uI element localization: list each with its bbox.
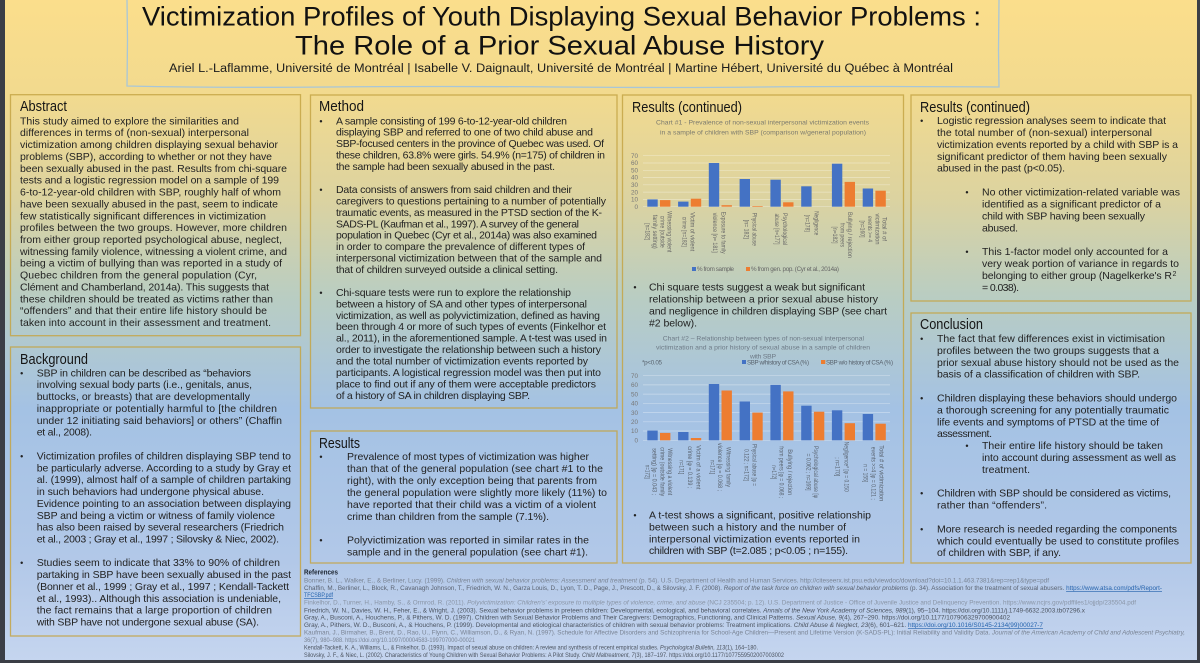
- heading: background: Background: [20, 351, 88, 368]
- method text: order to investigate the relationship between such a history: [336, 344, 602, 356]
- chi square text: •: [633, 283, 637, 293]
- chart 1 category labels: victimization: [874, 214, 881, 245]
- title box: [127, 0, 999, 88]
- chart 2 category labels: Psychological abuse [φ: [812, 446, 819, 498]
- logistic regression text: This 1-factor model only accounted for a: [982, 246, 1168, 258]
- chart 1 bars: % from general population: [660, 182, 886, 207]
- chi square text: relationship between a prior sexual abuse history: [649, 294, 879, 306]
- poster title: The Role of a Prior Sexual Abuse History: [295, 30, 825, 60]
- abstract text: these children should be treated as victims rather than: [20, 293, 273, 305]
- chi square text: Chi square tests suggest a weak but significant: [649, 282, 865, 294]
- t-test text: •: [633, 510, 637, 520]
- conclusion text: life events and symptoms of PTSD at the time of: [937, 416, 1159, 428]
- abstract text: “offenders” and that their entire life history should be: [20, 305, 267, 317]
- chart 2 category labels: = 0.062 ; n=169]: [804, 454, 811, 491]
- method text: of a history of SA in children displaying SBP.: [336, 390, 530, 402]
- chart 1 y axis: 0: [634, 204, 638, 211]
- abstract text: [19, 115, 287, 329]
- chart 1 category labels: events >= 4: [866, 216, 873, 242]
- chart 1 category labels: Bullying / rejection: [846, 212, 853, 259]
- method text: participants. A logistical regression model was then put into: [336, 367, 601, 379]
- heading: results continued: Results (continued): [920, 99, 1030, 116]
- chart 2 title: with SBP: [749, 353, 776, 360]
- authors: Ariel L.-Laflamme, Université de Montréal | Isabelle V. Daignault, Université de Montréal | Martine Hébert, Université du Québec à Montréal: [169, 63, 953, 75]
- results text: right), with the only exception being that parents from: [347, 475, 597, 487]
- logistic regression text: very weak portion of variance in regards to: [982, 258, 1179, 270]
- chart 2 legend: SBP w/o history of CSA (%): [826, 360, 893, 366]
- logistic regression text: •: [965, 247, 969, 257]
- chart 2 y axis: 0: [634, 438, 638, 444]
- panel: results continued with charts: [622, 95, 904, 563]
- chart 2 category labels: n=171]: [678, 460, 685, 474]
- chart 1 category labels: Total # of: [880, 217, 887, 241]
- conclusion text: basis of a classification of children with SBP.: [937, 369, 1140, 381]
- method text: al., 2011), in the aforementioned sample. A t-test was used in: [336, 333, 607, 345]
- heading: results continued: Results (continued): [632, 99, 742, 116]
- method text: these children, 63.8% were girls. 54.9% (n=175) of children in: [336, 150, 605, 162]
- abstract text: been sexually abused in the past. Results from chi-square: [20, 163, 287, 175]
- chart 1 category labels: Psychological: [781, 213, 788, 245]
- background text: Evidence pointing to an association between displaying: [37, 498, 291, 510]
- reference list: Chaffin, M., Berliner, L., Block, R., Cavanagh Johnson, T., Friedrich, W. N., Garza Louis, D., Lyon, T. D., Page, J., Prescott, D., & Silovsky, J. F. (2008). Report of the task force on children with sexual behavior problems (p. 34). Association for the treatment of sexual abusers. https://www.atsa.com/pdfs/Report-: [304, 585, 1162, 592]
- chart 2 category labels: setting) [φ = 0.043 ;: [650, 448, 657, 495]
- chart 2 category labels: events >=4 [φ = 0.121 ;: [869, 447, 876, 500]
- chart 2 y axis: 70: [631, 373, 638, 380]
- conclusion text: rather than “offenders”.: [937, 500, 1047, 512]
- chart 2 category labels: crime [φ = 0.139 ;: [686, 446, 693, 489]
- chart 1 title: [656, 120, 870, 136]
- chart 2 category labels: violence [φ = 0.068 ;: [716, 443, 723, 491]
- method text: between a history of SA and other types of interpersonal: [336, 298, 587, 310]
- logistic regression text: •: [965, 188, 969, 198]
- chart 1 bars: % from sample: [647, 163, 873, 207]
- chart 2 category labels: Bullying / rejection: [786, 449, 793, 496]
- results text: •: [319, 452, 323, 462]
- heading: results: Results: [319, 435, 360, 452]
- abstract text: witnessing family violence, witnessing a violent crime, and: [19, 246, 287, 258]
- method text: and the total number of victimization events reported by: [336, 356, 589, 368]
- results text: than that of the general population (see chart #1 to the: [347, 463, 603, 475]
- chart 1 category labels: Victim of violent: [688, 212, 695, 251]
- chart 2 category labels: Witnessing a violent: [666, 448, 673, 495]
- chart 2 category labels: n=172]: [770, 465, 777, 479]
- conclusion text: of children with SBP, if any.: [937, 547, 1061, 559]
- t-test text: interpersonal victimization events reported in: [649, 533, 860, 545]
- reference list: Kendall-Tackett, K. A., Williams, L., & Finkelhor, D. (1993). Impact of sexual abuse on children: A review and synthesis of recent empirical studies. Psychological Bulletin, 113(1), 164–180.: [304, 645, 758, 652]
- abstract text: have been sexually abused in the past, seem to indicate: [20, 198, 278, 210]
- reference list: 36(7), 980–988. https://doi.org/10.1097/00004583-199707000-00021: [304, 637, 475, 644]
- reference list: TFCSBP.pdf: [304, 592, 333, 599]
- conclusion text: a thorough screening for any potentially traumatic: [937, 404, 1169, 416]
- background text: has also been raised by several researchers (Friedrich: [37, 522, 284, 534]
- method text: [319, 115, 607, 402]
- chart 1 category labels: from peers: [838, 223, 845, 247]
- method text: in order to compare the prevalence of different types of: [336, 241, 585, 253]
- chart 2 y axis: 20: [631, 419, 638, 426]
- poster title: [142, 2, 981, 60]
- chart 1 title: Chart #1 - Prevalence of non-sexual interpersonal victimization events: [656, 120, 870, 127]
- heading: conclusion: Conclusion: [920, 316, 983, 333]
- background text: SBP and being a victim or witness of family violence: [37, 510, 275, 522]
- chart 2 category labels: Witnessing family: [724, 447, 731, 488]
- chart 1 y axis: 60: [631, 160, 638, 167]
- chart 2 bars: without history of CSA: [660, 390, 886, 440]
- background text: SBP in children can be described as “behaviors: [37, 367, 251, 379]
- abstract text: profiles between the two groups. However, more children: [20, 222, 287, 234]
- results text: Polyvictimization was reported in similar rates in the: [347, 535, 589, 547]
- chart 1 category labels: [n=182]: [643, 223, 650, 240]
- chart 1 category labels: family setting): [651, 215, 658, 249]
- reference list: Kaufman, J., Birmaher, B., Brent, D., Rao, U., Flynn, C., Williamson, D., & Ryan, N. (1997). Schedule for Affective Disorders and Schizophrenia for School-Age Children—Present and Lifetime Version (K-SADS-PL): Initial Reliability and Validity Data. Journal of the American Academy of Child and Adolescent Psychiatry,: [304, 630, 1185, 637]
- chart 1 y axis: 20: [631, 189, 638, 196]
- chart 1 category labels: [n=182]: [831, 226, 838, 244]
- reference list: Bonner, B. L., Walker, E., & Berliner, Lucy. (1999). Children with sexual behavior problems: Assessment and treatment (p. 54). U.S. Department of Health and Human Services. http://citeseerx.ist.psu.edu/viewdoc/download?doi=10.1.1.463.7381&rep=rep1&type=pdf: [304, 577, 1049, 584]
- chart 2 y axis: 10: [631, 428, 638, 435]
- chart 1 y axis: 70: [631, 153, 638, 160]
- conclusion text: •: [920, 489, 923, 499]
- references: [304, 568, 1185, 659]
- method text: SBP-focused centers in the province of Quebec was used. Of: [336, 138, 604, 150]
- abstract text: differences in terms of (non-sexual) interpersonal: [20, 127, 249, 139]
- chart 1 y axis: 50: [631, 168, 638, 174]
- chart 2 category labels: 0.122 ; n=172]: [743, 449, 750, 481]
- background text: Studies seem to indicate that 33% to 90% of children: [37, 557, 280, 569]
- chart 2 title: victimization and a prior history of sexual abuse in a sample of children: [656, 344, 870, 351]
- conclusion text: treatment.: [982, 464, 1030, 476]
- abstract text: 6-to-12-year-old children with SBP, roughly half of whom: [20, 186, 281, 198]
- panel: abstract: [10, 95, 300, 336]
- chart 1 y axis: 40: [631, 175, 638, 182]
- chart 2 category labels: n=171]: [709, 460, 716, 474]
- background text: [20, 367, 291, 629]
- conclusion text: •: [920, 334, 923, 344]
- chart 2 category labels: ; n=170]: [834, 457, 841, 476]
- chart 1 category labels: Witnessing violent: [665, 211, 672, 252]
- chart 1 category labels: Negligence: [813, 211, 820, 236]
- chi square text: [633, 282, 887, 330]
- conclusion text: [920, 333, 1179, 559]
- results text: sample and in the general population (see chart #1).: [347, 547, 588, 559]
- method text: •: [319, 116, 323, 126]
- chart 2 y axis: [631, 373, 638, 444]
- logistic regression text: child with SBP having been sexually: [982, 210, 1146, 222]
- method text: the sample had been sexually abused in the past.: [336, 161, 555, 173]
- conclusion text: Their entire life history should be taken: [982, 440, 1163, 452]
- background text: in such behaviors had undergone physical abuse.: [37, 486, 264, 498]
- chi square text: and negligence in children displaying SBP (see chart: [649, 306, 887, 318]
- logistic regression text: 2: [1172, 271, 1176, 278]
- method text: population in Quebec (Cyr et al., 2014a) was also examined: [336, 230, 597, 242]
- method text: been through 4 or more of such types of events (Finkelhor et: [336, 321, 606, 333]
- background text: •: [20, 451, 23, 461]
- logistic regression text: belonging to either group (Nagelkerke's R: [982, 270, 1172, 282]
- chart 1 category labels: Physical abuse: [750, 213, 757, 246]
- chart 2 legend: [642, 360, 893, 366]
- method text: •: [319, 185, 323, 195]
- conclusion text: profiles between the two groups suggests that a: [937, 345, 1159, 357]
- conclusion text: prior sexual abuse history should not be used as the: [937, 357, 1179, 369]
- chart 1 category labels: crime [n=182]: [680, 217, 687, 247]
- chart 1 title: in a sample of children with SBP (comparison w/general population): [660, 129, 866, 136]
- logistic regression text: the total number of (non-sexual) interpersonal: [937, 127, 1152, 139]
- background text: et al., 2008).: [37, 427, 92, 439]
- background text: involving sexual body parts (i.e., genitals, anus,: [37, 379, 252, 391]
- abstract text: This study aimed to explore the similarities and: [20, 115, 239, 127]
- logistic regression text: Logistic regression analyses seem to indicate that: [937, 115, 1166, 127]
- background text: partaking in SBP have been sexually abused in the past: [37, 569, 291, 581]
- method text: Data consists of answers from said children and their: [336, 184, 572, 196]
- chi square text: #2 below).: [649, 318, 697, 330]
- chart 2 category labels: Negligence* [φ = 0.150: [843, 442, 850, 492]
- chart 2 y axis: 30: [631, 410, 638, 417]
- panel: results continued, logistic regression: [911, 95, 1191, 301]
- logistic regression text: abused.: [982, 222, 1018, 234]
- chart 1 category labels: abuse [n=177]: [773, 214, 780, 245]
- reference list: Finkelhor, D., Turner, H., Hamby, S., & Ormrod, R. (2011). Polyvictimization: Children's' exposure to multiple types of violence, crime, and abuse (NCJ 235504; p. 12). U.S. Department of Justice - Office of Juvenile Justice and Delinquency Prevention. https://www.ncjrs.gov/pdffiles1/ojjdp/235504.pdf: [304, 600, 1136, 607]
- method text: place to find out if any of them were acceptable predictors: [336, 378, 596, 390]
- chart 2 bars: with history of CSA: [647, 384, 873, 440]
- poster title: Victimization Profiles of Youth Displaying Sexual Behavior Problems :: [142, 2, 981, 32]
- method text: A sample consisting of 199 6-to-12-year-old children: [336, 115, 567, 127]
- chart 2 category labels: crime (outside family: [659, 447, 666, 497]
- chart 1 category labels: crime (outside: [658, 216, 665, 248]
- chart 1 category labels: Exposure to family: [719, 212, 726, 254]
- reference list: Silovsky, J. F., & Niec, L. (2002). Characteristics of Young Children with Sexual Behavior Problems: A Pilot Study. Child Maltreatment, 7(3), 187–197. https://doi.org/10.1177/1077559502007003002: [304, 652, 784, 659]
- logistic regression text: victimization events reported by a child with SBP is a: [937, 139, 1178, 151]
- chart 1 legend: % from sample: [697, 266, 734, 273]
- chart 1 legend: % from gen. pop. (Cyr et al., 2014a): [751, 266, 839, 273]
- background text: •: [20, 368, 23, 378]
- chart 2 category labels: from peers [φ = 0.068 ;: [778, 446, 785, 499]
- logistic regression text: identified as a significant predictor of a: [982, 198, 1161, 210]
- logistic regression text: significant predictor of them having been sexually: [937, 151, 1168, 163]
- t-test text: A t-test shows a significant, positive relationship: [649, 510, 871, 522]
- background text: Victimization profiles of children displaying SBP tend to: [37, 450, 291, 462]
- chart 1 y axis: 30: [631, 182, 638, 189]
- chart 2 y axis: 60: [631, 382, 638, 389]
- abstract text: Quebec children from the general population (Cyr,: [20, 270, 257, 282]
- method text: victimization, as well as polyvictimization, defined as having: [336, 310, 600, 322]
- chart 2 category labels: Physical abuse [φ =: [750, 444, 757, 486]
- conclusion text: The fact that few differences exist in victimisation: [937, 333, 1165, 345]
- chart 1 category labels: violence [n= 181]: [711, 213, 718, 253]
- chart 2 y axis: 40: [631, 400, 638, 408]
- background text: buttocks, or breasts) that are developmentally: [37, 391, 251, 403]
- abstract text: from either group reported psychological abuse, neglect,: [20, 234, 282, 246]
- panel: method: [310, 95, 617, 408]
- reference list: Friedrich, W. N., Davies, W. H., Feher, E., & Wright, J. (2003). Sexual behavior problems in preteen children: Developmental, ecological, and behavioral correlates. Annals of the New York Academy of Sciences, 989(1), 95–104. https://doi.org/10.1111/j.1749-6632.2003.tb07296.x: [304, 607, 1086, 614]
- chart 1 category labels: [n= 182]: [742, 220, 749, 239]
- results text: have reported that their child was a victim of a violent: [347, 499, 596, 511]
- conclusion text: •: [920, 524, 923, 534]
- chart 2 category labels: [643, 442, 885, 502]
- background text: the fact remains that a large proportion of children: [37, 605, 272, 617]
- chart 2 title: Chart #2 – Relationship between types of non-sexual interpersonal: [663, 335, 864, 342]
- chart 1 category labels: [n=178]: [804, 215, 811, 232]
- reference list: Gray, A., Pithers, W. D., Busconi, A., & Houchens, P. (1999). Developmental and etiological characteristics of children with sexual behavior problems: Treatment implications. Child Abuse & Neglect, 23(6), 601–621. https://doi.org/10.1016/S0145-2134(99)00027-7: [304, 622, 1043, 629]
- conclusion text: •: [965, 441, 969, 451]
- chart 2 category labels: n=172]: [643, 465, 650, 479]
- conclusion text: Children displaying these behaviors should undergo: [937, 392, 1177, 404]
- chart 2 category labels: n = 155]: [862, 464, 869, 483]
- method text: displaying SBP and referred to one of two child abuse and: [336, 127, 593, 139]
- logistic regression text: No other victimization-related variable was: [982, 187, 1180, 199]
- chart 1 legend: [692, 266, 839, 273]
- abstract text: victimization among children displaying sexual behavior: [20, 139, 278, 151]
- abstract text: taken into account in their assessment and treatment.: [20, 317, 271, 329]
- logistic regression text: •: [920, 116, 923, 126]
- background text: (Bonner et al., 1999 ; Gray et al., 1997 ; Kendall-Tackett: [37, 581, 289, 593]
- heading: references: References: [304, 568, 338, 576]
- reference list: [304, 577, 1185, 659]
- abstract text: Clément and Chamberland, 2014a). This suggests that: [20, 282, 269, 294]
- background text: •: [20, 558, 23, 568]
- background text: be particularly adverse. According to a study by Gray et: [37, 462, 291, 474]
- logistic regression text: [920, 115, 1180, 294]
- chart 2 category labels: Victim of a violent: [694, 445, 701, 490]
- abstract text: being a victim of bullying than was reported in a study of: [20, 258, 282, 270]
- logistic regression text: abused in the past (p<0.05).: [937, 163, 1065, 175]
- abstract text: tests and a logistic regression model on a sample of 199: [20, 175, 279, 187]
- conclusion text: assessment.: [937, 428, 992, 440]
- background text: inappropriate or potentially harmful to [the children: [37, 403, 277, 415]
- chart 1 y axis: 10: [631, 197, 638, 204]
- results text: the general population were slightly more likely (11%) to: [347, 487, 607, 499]
- heading: method: Method: [319, 98, 364, 115]
- results text: [319, 451, 607, 559]
- method text: SADS-PL (Kaufman et al., 1997). A survey of the general: [336, 218, 579, 230]
- results text: •: [319, 536, 323, 546]
- conclusion text: •: [920, 394, 923, 404]
- background text: with SBP have not undergone sexual abuse (SA).: [36, 617, 259, 629]
- chart 1: prevalence of victimization: [631, 120, 890, 273]
- method text: Chi-square tests were run to explore the relationship: [336, 287, 571, 299]
- chart 1 category labels: [n=160]: [858, 220, 865, 238]
- heading: abstract: Abstract: [20, 98, 68, 115]
- chart 2: relationship with history of sexual abuse: [631, 335, 893, 502]
- chart 1 y axis: [631, 153, 638, 211]
- reference list: Gray, A., Busconi, A., Houchens, P., & Pithers, W. D. (1997). Children with Sexual Behavior Problems and Their Caregivers: Demographics, Functioning, and Clinical Patterns. Sexual Abuse, 9(4), 267–290. https://doi.org/10.1177/107906329700900402: [304, 615, 1010, 622]
- chart 2 title: [656, 335, 870, 360]
- background text: al. (1999), almost half of a sample of children partaking: [37, 474, 291, 486]
- chart 2 y axis: 50: [631, 391, 638, 398]
- results text: Prevalence of most types of victimization was higher: [347, 451, 590, 463]
- t-test text: between such a history and the number of: [649, 521, 846, 533]
- chart 2 legend: *p<0.05: [642, 360, 663, 366]
- method text: interpersonal victimization between that of the sample and: [336, 253, 602, 265]
- abstract text: few statistically significant differences in victimization: [20, 210, 266, 222]
- results text: crime than children from the sample (7.1%).: [347, 511, 549, 523]
- t-test text: [633, 510, 871, 557]
- panel: results: [310, 431, 617, 563]
- chart 2 legend: SBP w/history of CSA (%): [747, 360, 809, 366]
- chart 1 category labels: [643, 211, 887, 259]
- conclusion text: which could eventually be used to constitute profiles: [936, 535, 1179, 547]
- background text: et al., 1993).. Although this association is undeniable,: [37, 593, 281, 605]
- logistic regression text: = 0.038).: [982, 282, 1019, 294]
- conclusion text: More research is needed regarding the components: [937, 523, 1177, 535]
- method text: •: [319, 288, 323, 298]
- background text: under 12 initiating said behaviors] or others” (Chaffin: [37, 415, 282, 427]
- chart 2 category labels: Total # of victimization: [878, 445, 885, 502]
- method text: caregivers to questions pertaining to a number of potentially: [336, 195, 607, 207]
- panel: background: [10, 347, 300, 636]
- conclusion text: Children with SBP should be considered as victims,: [937, 488, 1171, 500]
- conclusion text: into account during assessment as well as: [982, 452, 1176, 464]
- abstract text: problems (SBP), according to whether or not they have: [20, 151, 272, 163]
- panel: conclusion: [911, 313, 1191, 563]
- method text: traumatic events, as measured in the PTSD section of the K-: [336, 207, 602, 219]
- method text: that of children surveyed outside a clinical setting.: [336, 264, 558, 276]
- t-test text: children with SBP (t=2.085 ; p<0.05 ; n=155).: [649, 545, 848, 557]
- background text: et al., 2003 ; Gray et al., 1997 ; Silovsky & Niec, 2002).: [37, 534, 279, 546]
